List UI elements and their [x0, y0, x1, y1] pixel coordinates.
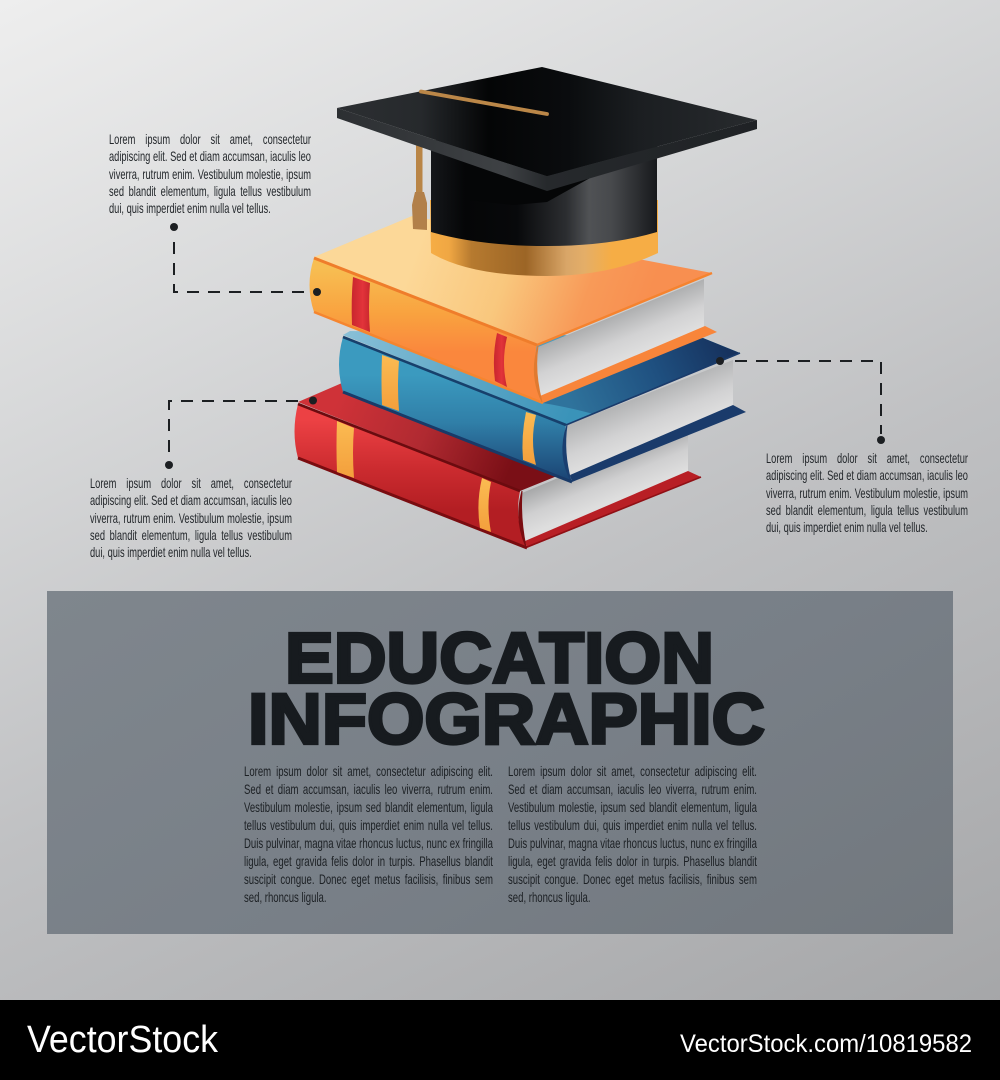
text block: body column left: tellus vestibulum dui, quis imperdiet enim nulla vel tellus.	[244, 817, 493, 833]
blue book cover top	[343, 331, 740, 425]
cap board top	[337, 67, 757, 176]
text block: right callout: dui, quis imperdiet enim nulla vel tellus.	[766, 519, 928, 535]
text block: body column right: Duis pulvinar, magna vitae rhoncus luctus, nunc ex fringilla	[508, 835, 756, 851]
blue book bottom cover	[570, 405, 746, 482]
red book bottom cover	[525, 471, 701, 548]
book: blue middle	[339, 331, 746, 482]
blue book band right	[522, 412, 536, 465]
blue book spine	[339, 337, 572, 482]
cap board edge	[337, 108, 757, 191]
callout connector: bottom left	[165, 396, 317, 469]
orange book cover top	[314, 216, 712, 345]
text block: right callout: adipiscing elit. Sed et diam accumsan, iaculis leo	[766, 467, 968, 483]
title	[248, 620, 765, 760]
blue book front edge	[566, 353, 740, 425]
cap body	[431, 140, 657, 246]
text block: body column right: Vestibulum molestie, ipsum sed blandit elementum, ligula	[508, 799, 756, 815]
red book cover top	[298, 383, 562, 491]
text block: top left callout: sed blandit elementum, ligula tellus vestibulum	[109, 183, 311, 199]
tassel string	[416, 143, 422, 193]
book: orange top	[310, 216, 717, 403]
text block: body column left: sed, rhoncus ligula.	[244, 889, 327, 905]
text block: body column left: Sed et diam accumsan, iaculis leo viverra, rutrum enim.	[244, 781, 493, 797]
text block: body column right	[508, 763, 757, 905]
text block: body column right: ligula, eget gravida felis dolor in turpis. Phasellus blandit	[508, 853, 756, 869]
blue book cover top shadow	[543, 338, 740, 414]
title: INFOGRAPHIC	[248, 680, 765, 760]
orange book edge right	[537, 273, 712, 345]
callout connector: top left	[170, 223, 321, 296]
orange book band right	[494, 333, 507, 387]
blue book band left	[382, 355, 399, 411]
text block: top left callout: dui, quis imperdiet enim nulla vel tellus.	[109, 200, 271, 216]
text block: right callout: Lorem ipsum dolor sit amet, consectetur	[766, 450, 968, 466]
book: red bottom	[294, 383, 701, 548]
text block: top left callout: viverra, rutrum enim. Vestibulum molestie, ipsum	[109, 166, 311, 182]
footer bar	[0, 1000, 1000, 1080]
text block: body column right: Sed et diam accumsan, iaculis leo viverra, rutrum enim.	[508, 781, 756, 797]
text block: body column left: Lorem ipsum dolor sit amet, consectetur adipiscing elit.	[244, 763, 493, 779]
text block: body column right: Lorem ipsum dolor sit amet, consectetur adipiscing elit.	[508, 763, 756, 779]
text block: top left callout: adipiscing elit. Sed et diam accumsan, iaculis leo	[109, 148, 311, 164]
callout connector: right	[716, 357, 885, 444]
blue book pages	[566, 360, 733, 476]
text block: body column right: tellus vestibulum dui, quis imperdiet enim nulla vel tellus.	[508, 817, 756, 833]
text block: right callout	[766, 450, 968, 535]
text block: body column right: suscipit congue. Donec eget metus facilisis, finibus sem	[508, 871, 756, 887]
text block: bottom left callout: dui, quis imperdiet enim nulla vel tellus.	[90, 544, 252, 560]
text block: bottom left callout: sed blandit elementum, ligula tellus vestibulum	[90, 527, 292, 543]
orange book spine	[310, 258, 543, 403]
text block: bottom left callout: viverra, rutrum enim. Vestibulum molestie, ipsum	[90, 510, 292, 526]
text block: right callout: sed blandit elementum, ligula tellus vestibulum	[766, 502, 968, 518]
cap body shadow	[470, 150, 590, 205]
text block: bottom left callout: adipiscing elit. Sed et diam accumsan, iaculis leo	[90, 492, 292, 508]
graduation cap	[337, 67, 757, 276]
footer logo text: VectorStock	[27, 1019, 219, 1061]
footer image id: VectorStock.com/10819582	[680, 1030, 972, 1058]
cap cord	[421, 92, 547, 114]
text block: right callout: viverra, rutrum enim. Vestibulum molestie, ipsum	[766, 485, 968, 501]
text block: body column left: Duis pulvinar, magna vitae rhoncus luctus, nunc ex fringilla	[244, 835, 493, 851]
text block: body column left: ligula, eget gravida felis dolor in turpis. Phasellus blandit	[244, 853, 493, 869]
text block: body column left: Vestibulum molestie, ipsum sed blandit elementum, ligula	[244, 799, 493, 815]
red book pages	[521, 424, 688, 543]
red book band right	[478, 478, 491, 532]
orange book bottom cover	[540, 326, 717, 403]
red book band left	[336, 421, 354, 478]
text block: bottom left callout	[90, 475, 292, 560]
text block: body column left: suscipit congue. Donec eget metus facilisis, finibus sem	[244, 871, 493, 887]
red book spine	[294, 404, 527, 548]
text block: body column left	[244, 763, 493, 905]
blue book shadow on red cover	[343, 385, 571, 482]
text block: bottom left callout: Lorem ipsum dolor sit amet, consectetur	[90, 475, 292, 491]
orange book pages	[536, 279, 704, 397]
panel: title and body text background	[47, 591, 953, 934]
text block: top left callout	[109, 131, 311, 216]
cap band	[430, 200, 658, 276]
title: EDUCATION	[285, 620, 714, 698]
orange book band left	[352, 277, 370, 332]
text block: top left callout: Lorem ipsum dolor sit amet, consectetur	[109, 131, 311, 147]
tassel	[412, 192, 427, 230]
text block: body column right: sed, rhoncus ligula.	[508, 889, 590, 905]
